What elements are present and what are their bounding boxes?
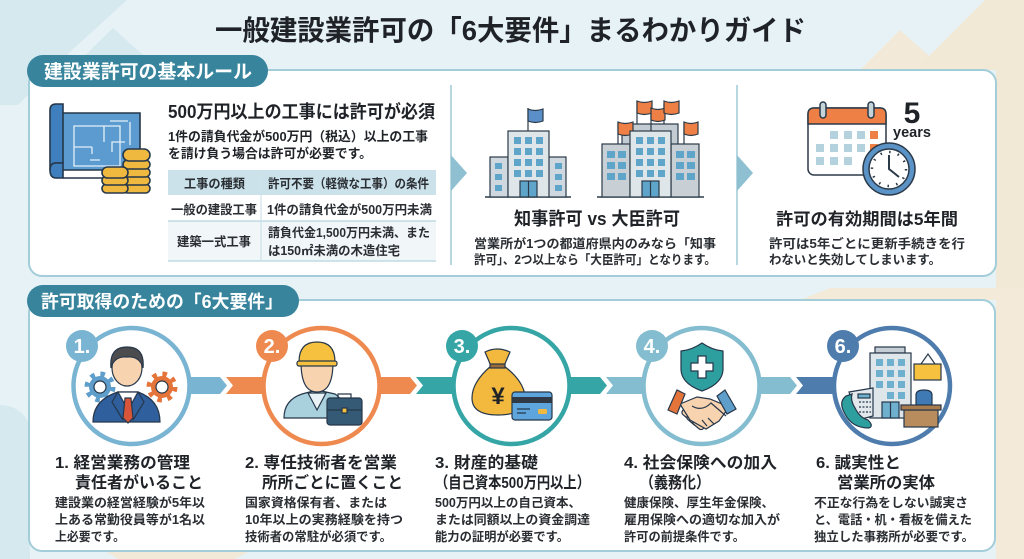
circle 3 [454,328,570,444]
badge 1 [66,330,98,362]
badge 1: 1. [74,336,90,358]
text: step 3: （自己資本500万円以上） [435,473,590,492]
circle 1 [74,328,190,444]
text block: governor vs minister: 営業所が1つの都道府県内のみなら「知事 [474,236,717,251]
text block: validity: 許可は5年ごとに更新手続きを行 [769,236,965,251]
circle 6 [834,328,950,444]
text: step 6: 不正な行為をしない誠実さ [814,495,968,510]
icon: manager with gears [87,347,175,423]
text: step 1: 上必要です。 [55,529,125,544]
heading tab: six requirements: 許可取得のための「6大要件」 [41,292,283,312]
text: step 3: または同額以上の資金調達 [435,512,591,527]
heading tab: basic rules: 建設業許可の基本ルール [44,60,252,83]
icon: governor permit building [485,108,571,197]
text: step 6 [814,453,974,544]
icon: minister permit buildings [597,101,704,197]
icon: money bag and card: ¥ [491,383,505,410]
panel: basic rules [27,55,996,276]
badge 4 [636,330,668,362]
table: light work conditions: 一般の建設工事 [171,202,257,217]
text: step 3: 能力の証明が必要です。 [435,529,569,544]
icon: site engineer [284,342,362,425]
table: light work conditions: は150㎡未満の木造住宅 [268,243,400,258]
text block: validity: わないと失効してしまいます。 [769,252,941,267]
text: step 2: 2. 専任技術者を営業 [245,453,397,472]
step 1 [55,328,206,544]
circle 2 [264,328,380,444]
text: step 1: 上ある常勤役員等が1名以 [55,512,206,527]
text: step 4: （義務化） [640,473,710,492]
badge 3 [446,330,478,362]
table: light work conditions: 許可不要（軽微な工事）の条件 [268,176,429,191]
heading tab: six requirements [27,285,299,317]
divider arrow 2 [737,85,753,265]
icon: shield and handshake [668,343,736,431]
icon: office with phone and desk [842,347,941,428]
text: step 2: 技術者の常駐が必須です。 [245,529,392,544]
badge 6: 6. [835,336,851,358]
text: step 4: 雇用保険への適切な加入が [624,512,781,527]
text: step 6: 独立した事務所が必要です。 [814,529,974,544]
step 3 [435,328,591,544]
text block: must have permit: 500万円以上の工事には許可が必須 [168,101,435,122]
text block: must have permit: 1件の請負代金が500万円（税込）以上の工事 [168,129,428,144]
text: step 2 [245,453,403,544]
text: step 2: 10年以上の実務経験を持つ [245,512,403,527]
text: step 2: 国家資格保有者、または [245,495,388,510]
text block: governor vs minister [474,209,717,267]
title: 一般建設業許可の「6大要件」まるわかりガイド [215,15,806,46]
icon: blueprint and coins [50,104,150,193]
text: step 3 [435,453,591,544]
divider arrow 1 [451,85,467,265]
text: step 1 [55,453,206,544]
text: step 1: 建設業の経営経験が5年以 [55,495,206,510]
text: step 4: 健康保険、厚生年金保険、 [624,495,774,510]
text block: must have permit [168,101,435,161]
badge 2 [256,330,288,362]
text: step 6: 営業所の実体 [837,473,935,492]
badge 6 [827,330,859,362]
text block: governor vs minister: 知事許可 vs 大臣許可 [514,209,680,229]
step 6 [814,328,974,544]
step 4 [624,328,781,544]
text: step 6: と、電話・机・看板を備えた [814,512,972,527]
icon label: 5 years [893,97,931,141]
circle 4 [644,328,760,444]
panel: six requirements [27,285,995,551]
text block: validity: 許可の有効期間は5年間 [776,209,958,229]
text: step 3: 500万円以上の自己資本、 [435,495,581,510]
text block: must have permit: を請け負う場合は許可が必要です。 [168,146,372,161]
text: step 1: 1. 経営業務の管理 [55,453,190,472]
text: step 6: 6. 誠実性と [816,453,901,472]
table: light work conditions: 工事の種類 [184,176,245,191]
step 2 [245,328,403,544]
connector arrows [190,377,835,394]
text: step 4 [624,454,781,544]
text: step 2: 所所ごとに置くこと [262,473,403,492]
heading tab: basic rules [27,55,268,87]
text: step 4: 4. 社会保険への加入 [624,454,777,472]
badge 2: 2. [264,336,280,358]
text: step 4: 許可の前提条件です。 [624,529,745,544]
text block: validity [769,209,965,267]
badge 4: 4. [644,336,660,358]
table: light work conditions: 建築一式工事 [177,234,251,249]
badge 3: 3. [454,336,470,358]
icon label: 5 years: years [893,124,931,141]
text: step 3: 3. 財産的基礎 [435,453,538,472]
icon label: 5 years: 5 [904,97,920,130]
text: step 1: 責任者がいること [75,473,203,492]
text block: governor vs minister: 許可」、2つ以上なら「大臣許可」となります。 [474,252,716,267]
table: light work conditions: 1件の請負代金が500万円未満 [267,202,432,217]
table: light work conditions: 請負代金1,500万円未満、また [268,225,430,240]
icon: calendar and clock [808,102,915,195]
table: light work conditions [168,170,436,261]
icon: money bag and card [472,349,552,420]
